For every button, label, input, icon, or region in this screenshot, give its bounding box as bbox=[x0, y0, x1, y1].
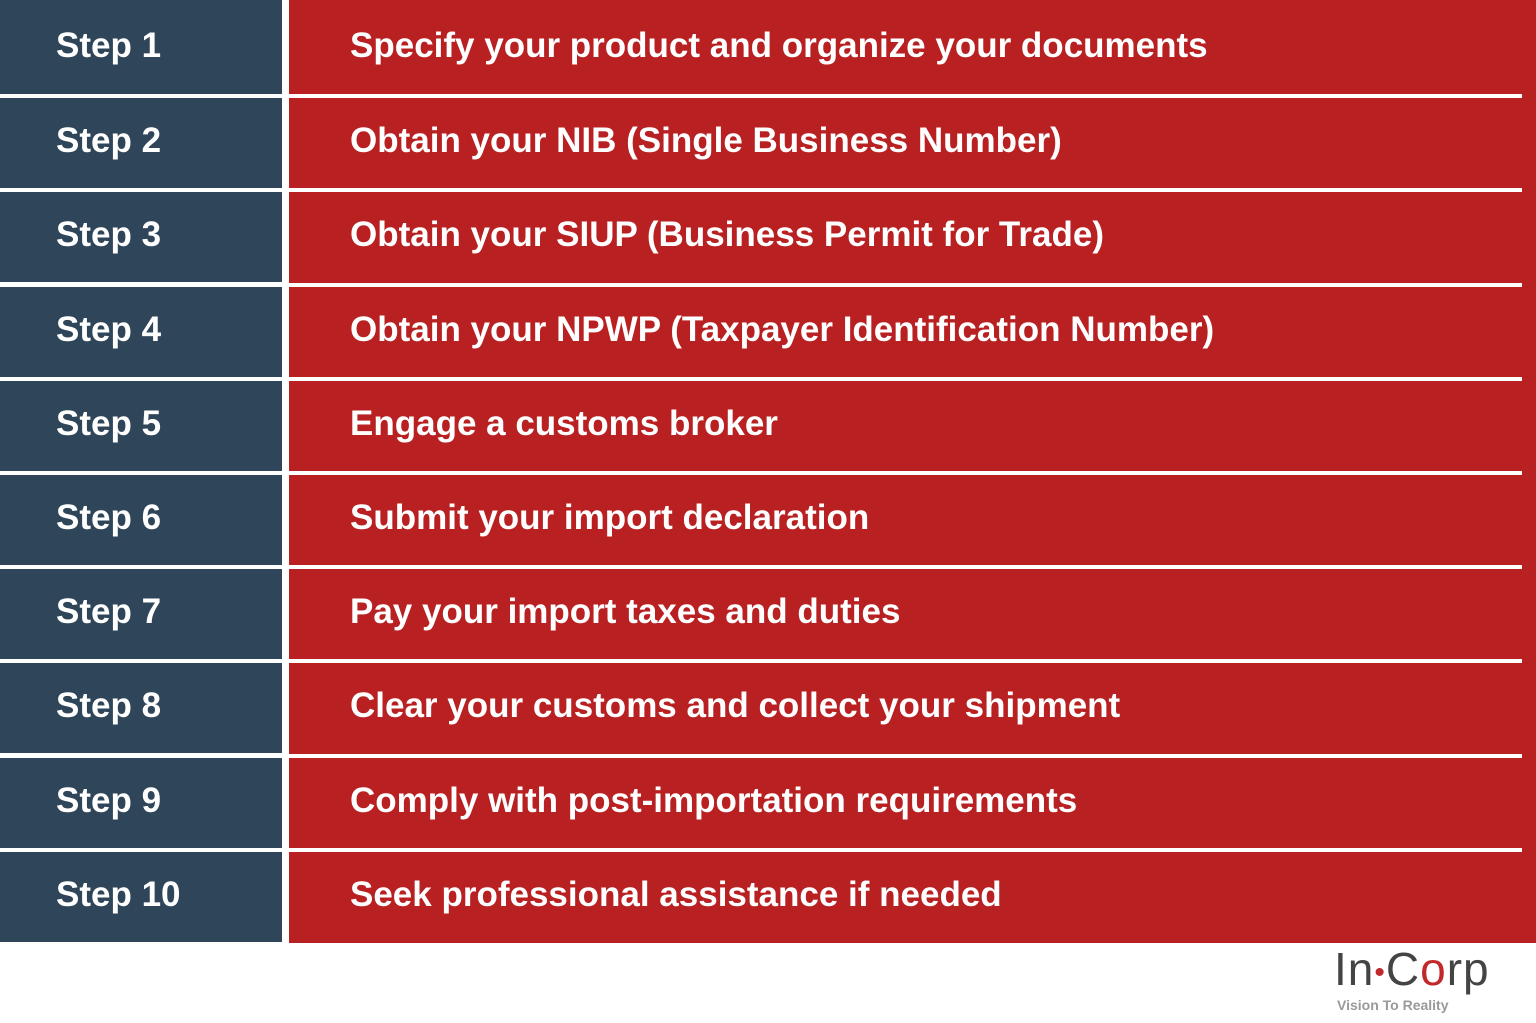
row: step 8 bbox=[0, 663, 1120, 753]
row: step 6 bbox=[0, 475, 869, 565]
row: step 3: Step 3 bbox=[56, 215, 161, 254]
row: step 10: Seek professional assistance if needed bbox=[350, 875, 1002, 914]
row: step 5: Engage a customs broker bbox=[350, 404, 778, 443]
row: step 7 bbox=[0, 569, 900, 659]
row: step 2: Obtain your NIB (Single Business Number) bbox=[350, 121, 1062, 160]
row: step 8: Step 8 bbox=[56, 686, 161, 725]
row: step 1 bbox=[0, 0, 1208, 94]
row: step 8: Clear your customs and collect your shipment bbox=[350, 686, 1120, 725]
row: step 6: Submit your import declaration bbox=[350, 498, 869, 537]
row: step 3 bbox=[0, 192, 1104, 282]
row: step 9 bbox=[0, 758, 1077, 848]
row: step 9: Step 9 bbox=[56, 781, 161, 820]
row: step 3: Obtain your SIUP (Business Permit for Trade) bbox=[350, 215, 1104, 254]
row: step 7: Pay your import taxes and duties bbox=[350, 592, 900, 631]
row: step 4: Step 4 bbox=[56, 310, 161, 349]
row: step 4: Obtain your NPWP (Taxpayer Identification Number) bbox=[350, 310, 1214, 349]
row: step 4 bbox=[0, 287, 1214, 377]
row: step 9: Comply with post-importation requirements bbox=[350, 781, 1077, 820]
row: step 6: Step 6 bbox=[56, 498, 161, 537]
row: step 10 bbox=[0, 852, 1002, 942]
row: step 1: Specify your product and organize your documents bbox=[350, 26, 1208, 65]
row: step 10: Step 10 bbox=[56, 875, 180, 914]
logo: In•Corp bbox=[1334, 943, 1490, 995]
row: step 7: Step 7 bbox=[56, 592, 161, 631]
row: step 1: Step 1 bbox=[56, 26, 161, 65]
row: step 5 bbox=[0, 381, 778, 471]
row: step 5: Step 5 bbox=[56, 404, 161, 443]
row: step 2 bbox=[0, 98, 1062, 188]
row: step 2: Step 2 bbox=[56, 121, 161, 160]
logo: Vision To Reality bbox=[1337, 997, 1449, 1013]
